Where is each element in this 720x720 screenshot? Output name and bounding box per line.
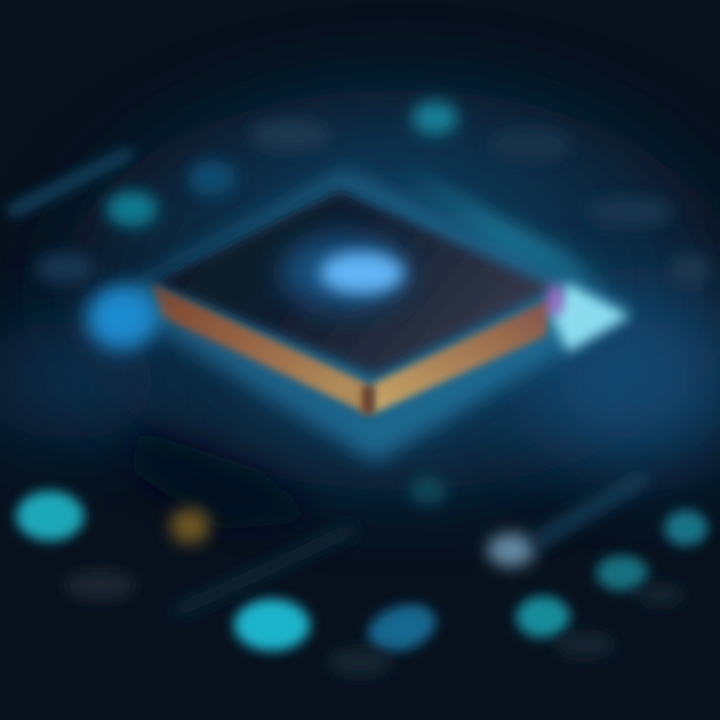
chip centre notch [362, 386, 374, 414]
chip right edge [372, 298, 552, 414]
floating nodes: lower area [16, 476, 708, 676]
chip left edge [152, 284, 368, 414]
chip shadow below [130, 430, 320, 530]
floating nodes: upper area [15, 101, 710, 286]
chip base plate [108, 165, 635, 462]
left glow [86, 286, 158, 350]
right corner: pale cyan glow [548, 282, 630, 352]
central glow [280, 234, 410, 310]
chip top face [152, 190, 555, 375]
